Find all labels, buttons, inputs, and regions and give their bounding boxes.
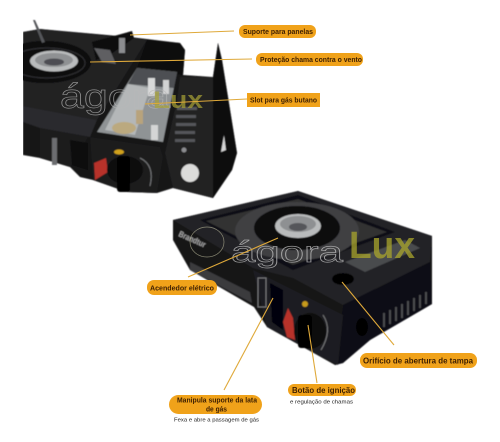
callout: Acendedor elétrico: Acendedor elétrico bbox=[150, 286, 214, 292]
callout: Orifício de abertura de tampa bbox=[342, 282, 477, 368]
top surface bbox=[173, 191, 432, 305]
watermark: bottom bbox=[190, 225, 415, 269]
brand text: Brandtur bbox=[177, 229, 207, 250]
top hole bbox=[332, 273, 354, 285]
callout: Slot para gás butano: Slot para gás butano bbox=[250, 98, 317, 104]
note: passagem de gás: Fexa e abre a passagem de gás bbox=[174, 418, 259, 424]
pan support bbox=[92, 31, 134, 60]
control panel bbox=[253, 270, 343, 365]
pan plate bbox=[200, 195, 395, 270]
callout: Botão de ignição: Botão de ignição bbox=[292, 386, 355, 395]
callout: Manipula suporte da lata de gás: Manipula suporte da lata bbox=[177, 398, 257, 404]
callout: Suporte para panelas bbox=[130, 25, 316, 38]
callout: Suporte para panelas: Suporte para panelas bbox=[243, 29, 313, 36]
watermark: bottom: Lux bbox=[349, 225, 415, 267]
callout: Manipula suporte da lata de gás bbox=[169, 298, 273, 424]
ignition knob bbox=[283, 308, 295, 340]
watermark: bottom: ágora bbox=[231, 236, 343, 269]
photo: closed stove bbox=[173, 191, 432, 365]
callout: Manipula suporte da lata de gás: de gás bbox=[206, 406, 227, 414]
burner bbox=[254, 206, 340, 250]
instruction lines bbox=[345, 240, 420, 272]
vent panel bbox=[165, 77, 213, 198]
stove body bbox=[173, 191, 432, 365]
top plate bbox=[23, 29, 147, 120]
callout: Orifício de abertura de tampa: Orifício de abertura de tampa bbox=[363, 356, 474, 366]
watermark: top: ágora bbox=[60, 78, 170, 116]
watermark: top: Lux bbox=[153, 87, 204, 114]
callout: Botão de ignição bbox=[288, 325, 356, 406]
ignition knob bbox=[94, 158, 108, 180]
note: regulação: e regulação de chamas bbox=[290, 400, 353, 406]
gas slot bbox=[97, 68, 177, 142]
right face bbox=[335, 262, 432, 365]
burner bbox=[23, 41, 91, 83]
lid recess bbox=[137, 40, 185, 75]
callout: Acendedor elétrico bbox=[147, 238, 278, 295]
side panel bbox=[40, 140, 84, 168]
callout: Proteção chama contra o vento: Proteção chama contra o vento bbox=[260, 57, 362, 64]
stove body bbox=[23, 29, 237, 198]
control panel bbox=[93, 148, 154, 194]
callout: Proteção chama contra o vento bbox=[90, 53, 363, 66]
side label strip bbox=[190, 262, 252, 303]
callout: Slot para gás butano bbox=[145, 93, 320, 107]
wind shield bbox=[213, 43, 237, 198]
watermark: top bbox=[60, 78, 204, 116]
photo: open stove with gas slot bbox=[0, 20, 237, 198]
